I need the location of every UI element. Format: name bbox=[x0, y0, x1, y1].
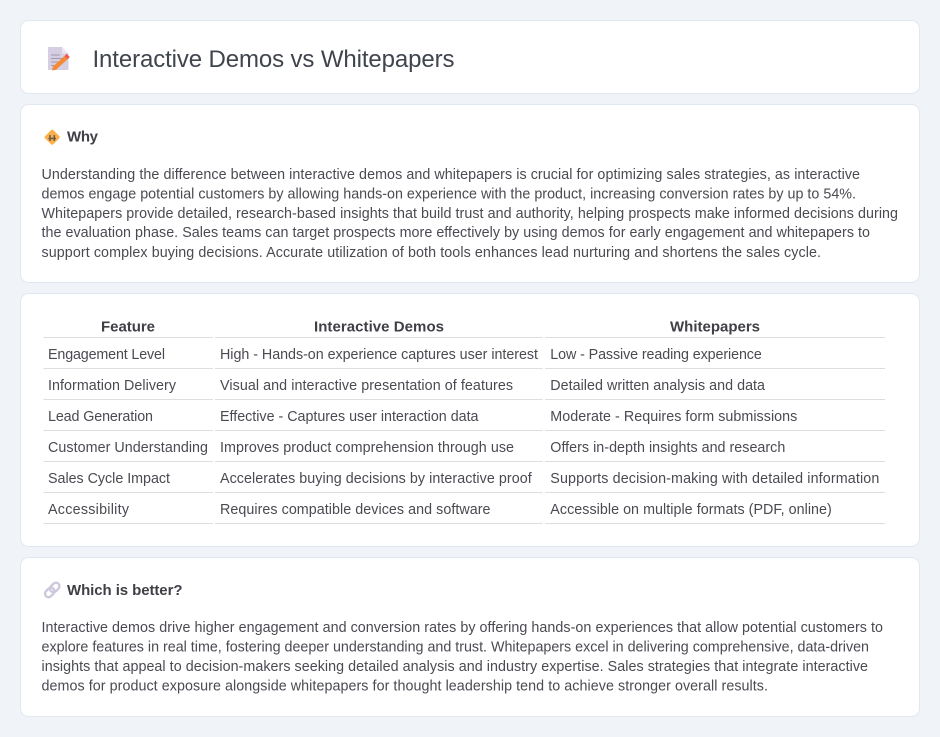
icon: document with pencil bbox=[48, 47, 70, 70]
icon: chain link bbox=[44, 581, 61, 599]
table row: accessibility: Accessible on multiple formats (PDF, online) bbox=[550, 502, 832, 518]
table row: accessibility: Requires compatible devices and software bbox=[220, 502, 491, 518]
table row: lead generation: Lead Generation bbox=[48, 409, 153, 425]
table row: customer understanding: Offers in-depth insights and research bbox=[550, 440, 785, 456]
table row: information delivery bbox=[48, 378, 765, 394]
table row: engagement level bbox=[48, 347, 762, 363]
text block: which is better paragraph: Interactive demos drive higher engagement and conversion rates by offering hands-on experiences that allow potential customers to bbox=[42, 620, 883, 636]
panel: which is better bbox=[20, 558, 920, 716]
table row: sales cycle impact: Accelerates buying decisions by interactive proof bbox=[220, 471, 532, 487]
table row: engagement level: Engagement Level bbox=[48, 347, 165, 363]
text block: why paragraph: Whitepapers provide detailed, research-based insights that build trust and authority, helping prospects make informed decisions during bbox=[42, 206, 898, 222]
panel: title header bbox=[20, 20, 920, 94]
panel: why bbox=[20, 104, 920, 282]
text block: which is better paragraph: insights that appeal to decision-makers seeking detailed analysis and industry expertise. Sales strategies that integrate interactive bbox=[42, 659, 868, 675]
text block: which is better paragraph bbox=[42, 620, 883, 694]
table row: customer understanding: Customer Understanding bbox=[48, 440, 208, 456]
table row: sales cycle impact: Supports decision-making with detailed information bbox=[550, 471, 879, 487]
table row: accessibility bbox=[48, 502, 832, 518]
heading: why: Why bbox=[67, 128, 99, 146]
table row: engagement level: High - Hands-on experience captures user interest bbox=[220, 347, 538, 363]
table header row: Whitepapers bbox=[670, 318, 760, 336]
panel: comparison table bbox=[20, 294, 920, 546]
text block: why paragraph bbox=[42, 167, 898, 261]
table row: lead generation bbox=[48, 409, 797, 425]
text block: which is better paragraph: demos for product exposure alongside whitepapers for thought leadership tend to achieve stronger overall results. bbox=[42, 678, 768, 694]
table row: information delivery: Information Delivery bbox=[48, 378, 177, 394]
table header row: Interactive Demos bbox=[314, 318, 444, 336]
table row: customer understanding: Improves product comprehension through use bbox=[220, 440, 514, 456]
table row: sales cycle impact: Sales Cycle Impact bbox=[48, 471, 170, 487]
table row: lead generation: Effective - Captures user interaction data bbox=[220, 409, 479, 425]
text block: why paragraph: Understanding the difference between interactive demos and whitepapers is crucial for optimizing sales strategies, as interactive bbox=[42, 167, 860, 183]
icon: diamond sign bbox=[44, 129, 60, 145]
table row: customer understanding bbox=[48, 440, 785, 456]
table row: information delivery: Detailed written analysis and data bbox=[550, 378, 765, 394]
table header row bbox=[101, 318, 760, 336]
table row: sales cycle impact bbox=[48, 471, 879, 487]
table row: lead generation: Moderate - Requires form submissions bbox=[550, 409, 797, 425]
text block: why paragraph: support complex buying decisions. Accurate utilization of both tools enhances lead nurturing and shortens the sales cycle. bbox=[42, 245, 821, 261]
text block: why paragraph: the evaluation phase. Sales teams can target prospects more effectively by using demos for early engagement and whitepapers to bbox=[42, 225, 870, 241]
text block: why paragraph: demos engage potential customers by allowing hands-on experience with the product, increasing conversion rates by up to 54%. bbox=[42, 186, 856, 202]
table row: engagement level: Low - Passive reading experience bbox=[550, 347, 762, 363]
text block: which is better paragraph: explore features in real time, fostering deeper understanding and trust. Whitepapers excel in delivering comprehensive, data-driven bbox=[42, 640, 869, 656]
table row: information delivery: Visual and interactive presentation of features bbox=[220, 378, 513, 394]
heading: which is better: Which is better? bbox=[67, 582, 182, 599]
title: Interactive Demos vs Whitepapers bbox=[92, 46, 454, 73]
table row: accessibility: Accessibility bbox=[48, 502, 130, 518]
table header row: Feature bbox=[101, 318, 155, 336]
